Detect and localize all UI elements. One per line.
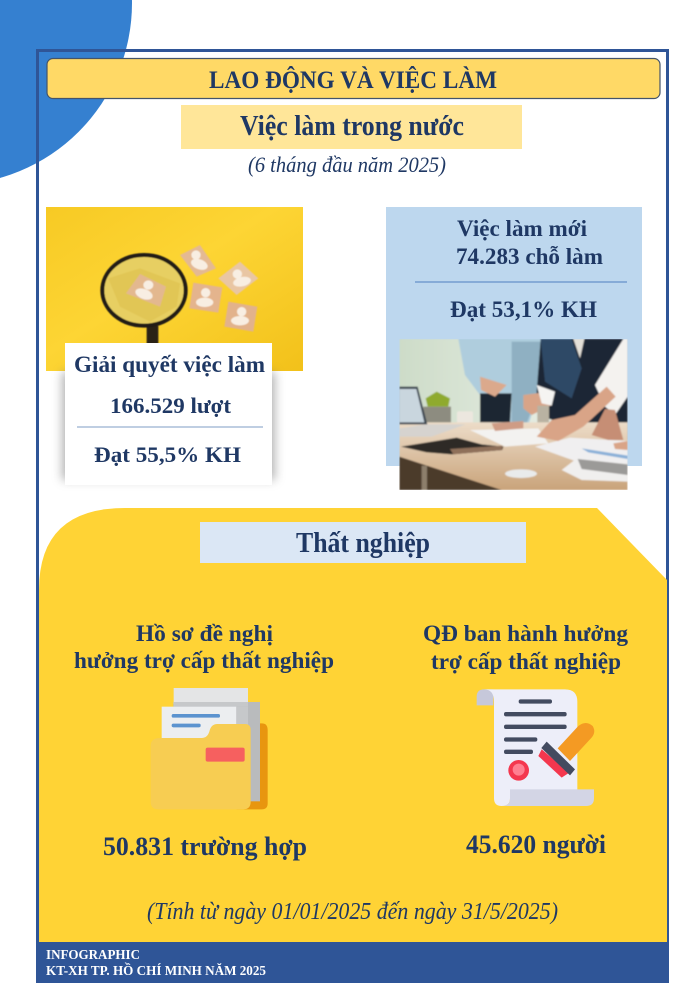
date range note: (Tính từ ngày 01/01/2025 đến ngày 31/5/2025)	[147, 899, 558, 925]
label: decisions: QĐ ban hành hưởng	[423, 621, 629, 646]
new jobs figures: Việc làm mới	[457, 216, 588, 241]
label: applications: hưởng trợ cấp thất nghiệp	[74, 648, 334, 673]
panel: new jobs	[386, 207, 642, 490]
icon: folder with documents	[151, 688, 268, 809]
stat: decisions count: 45.620 người	[466, 830, 606, 859]
footer bar: INFOGRAPHIC	[46, 947, 140, 962]
panel: unemployment	[39, 508, 667, 942]
label: applications: Hồ sơ đề nghị	[136, 621, 274, 646]
card: job placement figures	[62, 343, 275, 485]
section heading: unemployment	[200, 522, 526, 563]
photo: team at a desk	[399, 339, 628, 490]
label: decisions	[423, 621, 629, 674]
title bar	[47, 58, 660, 98]
panel: job placement	[46, 207, 303, 485]
decorative blue circle	[0, 0, 132, 185]
section heading: domestic jobs	[181, 105, 522, 149]
photo: magnifier and people blocks	[46, 207, 303, 371]
footer bar: KT-XH TP. HỒ CHÍ MINH NĂM 2025	[46, 963, 266, 978]
new jobs figures	[415, 216, 627, 322]
new jobs figures: 74.283 chỗ làm	[456, 244, 603, 269]
section heading: domestic jobs: Việc làm trong nước	[240, 111, 464, 142]
icon: certificate with stamp	[477, 689, 594, 806]
stat: applications count: 50.831 trường hợp	[103, 832, 307, 861]
card: job placement figures: 166.529 lượt	[110, 393, 232, 418]
period note: (6 tháng đầu năm 2025)	[248, 152, 446, 177]
card: job placement figures: Đạt 55,5% KH	[94, 442, 241, 467]
label: applications	[74, 621, 334, 673]
card: job placement figures: Giải quyết việc làm	[74, 352, 265, 377]
title bar: LAO ĐỘNG VÀ VIỆC LÀM	[209, 66, 497, 94]
label: decisions: trợ cấp thất nghiệp	[431, 649, 621, 674]
new jobs figures: Đạt 53,1% KH	[450, 297, 597, 322]
footer bar	[36, 942, 669, 983]
section heading: unemployment: Thất nghiệp	[296, 528, 430, 559]
